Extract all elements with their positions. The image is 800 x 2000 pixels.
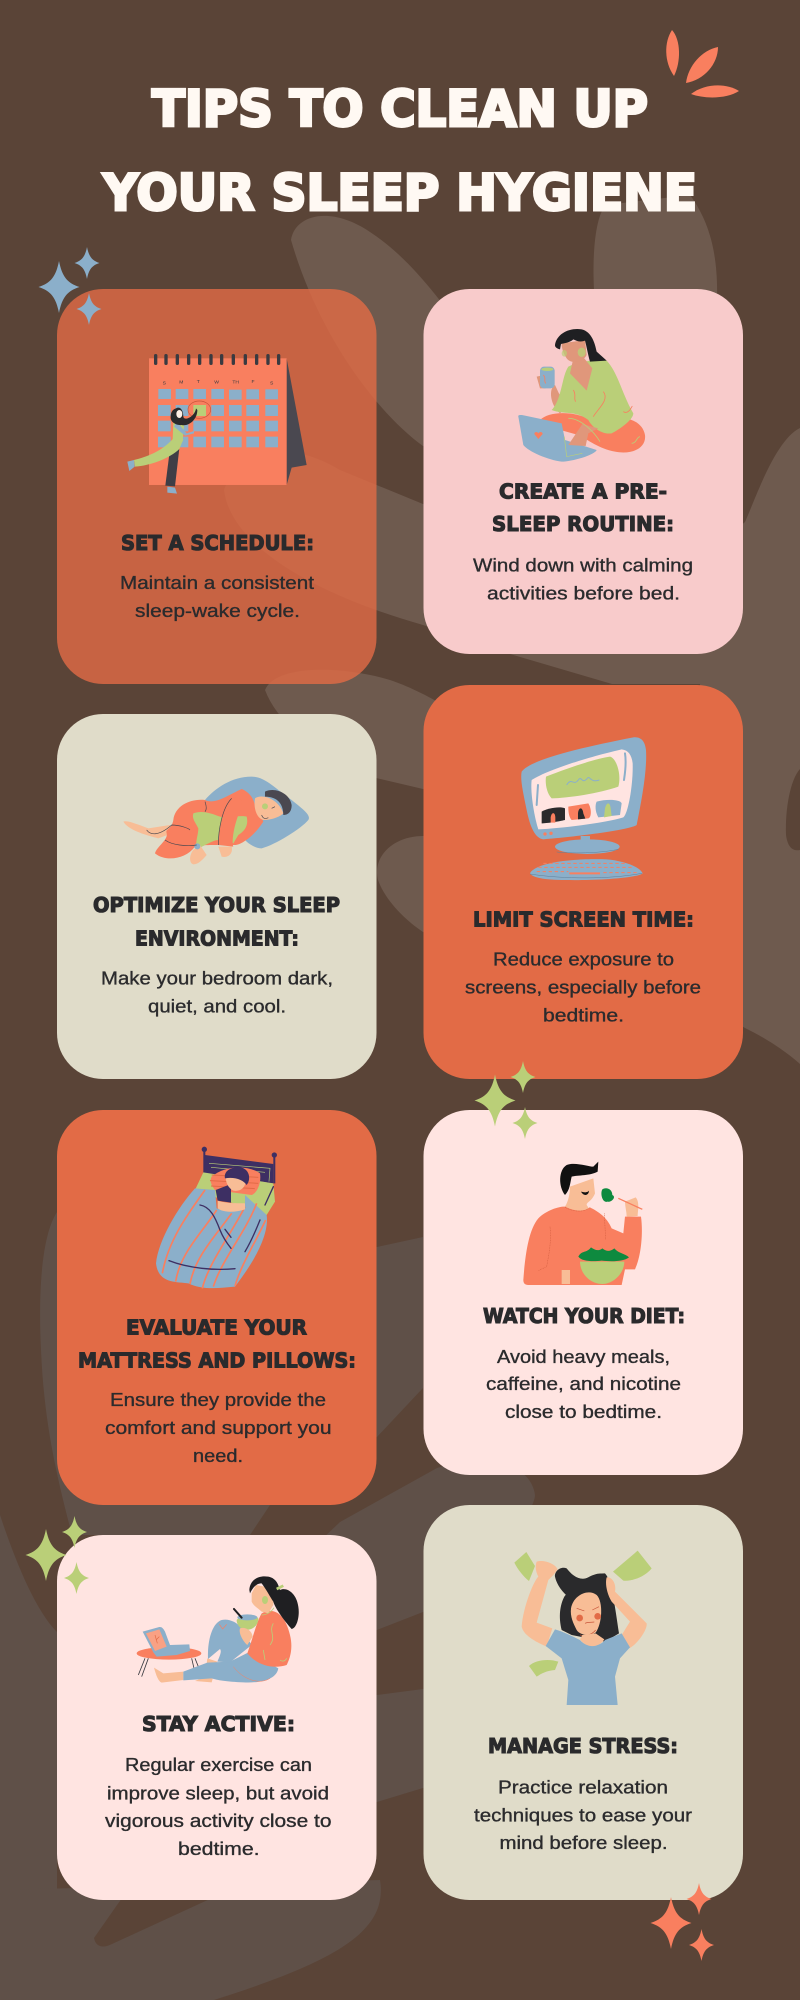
icon: person in striped bed (156, 1147, 277, 1288)
body text: activities before bed. (487, 582, 680, 604)
body text (105, 1389, 332, 1466)
body text: Reduce exposure to (493, 949, 674, 970)
body text: comfort and support you (105, 1417, 332, 1438)
icon: green sparkles left (26, 1516, 89, 1594)
body text (120, 572, 314, 621)
icon: calendar with woman: S (270, 380, 274, 386)
icon: computer monitor (521, 737, 646, 880)
icon: man eating salad (523, 1162, 642, 1285)
icon: stressed woman pulling hair (514, 1551, 652, 1705)
body text: Ensure they provide the (110, 1389, 326, 1410)
icon: blue sparkles (38, 247, 102, 325)
heading: MANAGE STRESS: (488, 1734, 678, 1758)
heading (492, 480, 674, 536)
icon: calendar with woman: M (179, 380, 183, 386)
icon: sleeping person (123, 777, 309, 864)
body text: vigorous activity close to (105, 1810, 332, 1831)
icon: calendar with woman: T (197, 379, 200, 385)
body text: bedtime. (543, 1004, 624, 1026)
heading (93, 893, 340, 951)
body text (465, 949, 701, 1026)
body text (101, 968, 333, 1017)
body text (486, 1346, 681, 1422)
background shapes: lower flower (0, 1212, 535, 2000)
body text: Practice relaxation (498, 1777, 668, 1798)
body text: caffeine, and nicotine (486, 1373, 681, 1394)
panel: limit screen time (424, 685, 743, 1079)
title: TIPS TO CLEAN UP (152, 80, 648, 138)
heading: LIMIT SCREEN TIME: (473, 907, 694, 931)
body text: sleep-wake cycle. (135, 600, 300, 621)
icon: woman sitting with laptop and bowl (137, 1576, 299, 1683)
heading: STAY ACTIVE: (142, 1712, 295, 1736)
panel: optimize your sleep environment (57, 714, 376, 1079)
body text: mind before sleep. (500, 1832, 668, 1853)
panel: create a pre-sleep routine (424, 289, 743, 654)
body text: improve sleep, but avoid (107, 1782, 329, 1803)
body text: techniques to ease your (474, 1804, 692, 1825)
heading: MATTRESS AND PILLOWS: (78, 1348, 356, 1372)
background shapes: upper flower (224, 195, 800, 1064)
heading: WATCH YOUR DIET: (483, 1304, 685, 1328)
body text: screens, especially before (465, 976, 701, 997)
heading: SLEEP ROUTINE: (492, 512, 674, 536)
body text: Make your bedroom dark, (101, 968, 333, 988)
icon: coral accent strokes (666, 30, 739, 97)
body text: Maintain a consistent (120, 572, 314, 593)
icon: calendar with woman: S (163, 380, 167, 386)
body text: need. (193, 1445, 243, 1466)
heading (78, 1316, 356, 1372)
icon: calendar with woman: W (214, 380, 219, 386)
panel: evaluate your mattress and pillows (57, 1110, 376, 1505)
panel: watch your diet (424, 1110, 743, 1475)
title (102, 80, 697, 222)
body text: Regular exercise can (125, 1754, 312, 1775)
heading: OPTIMIZE YOUR SLEEP (93, 893, 340, 917)
icon: coral sparkles (650, 1883, 714, 1961)
panel: stay active (57, 1535, 376, 1900)
icon: calendar with woman: TH (232, 380, 239, 386)
background notch (786, 769, 800, 850)
body text (473, 554, 693, 604)
body text: Avoid heavy meals, (497, 1346, 670, 1367)
body text: Wind down with calming (473, 554, 693, 576)
heading: EVALUATE YOUR (126, 1316, 307, 1340)
body text: quiet, and cool. (148, 996, 286, 1017)
heading: SET A SCHEDULE: (121, 531, 314, 555)
title: YOUR SLEEP HYGIENE (102, 164, 697, 222)
body text: bedtime. (178, 1838, 260, 1859)
icon: green sparkles right (474, 1061, 538, 1139)
icon: calendar with woman: F (251, 379, 255, 385)
panel: set a schedule (57, 289, 376, 684)
heading: ENVIRONMENT: (135, 927, 299, 951)
panel: manage stress (424, 1505, 743, 1900)
body text: close to bedtime. (505, 1401, 662, 1422)
body text (105, 1754, 332, 1859)
icon: calendar with woman (127, 354, 307, 494)
body text (474, 1777, 692, 1853)
heading: CREATE A PRE- (499, 480, 667, 504)
icon: woman with cup and laptop (518, 329, 645, 462)
